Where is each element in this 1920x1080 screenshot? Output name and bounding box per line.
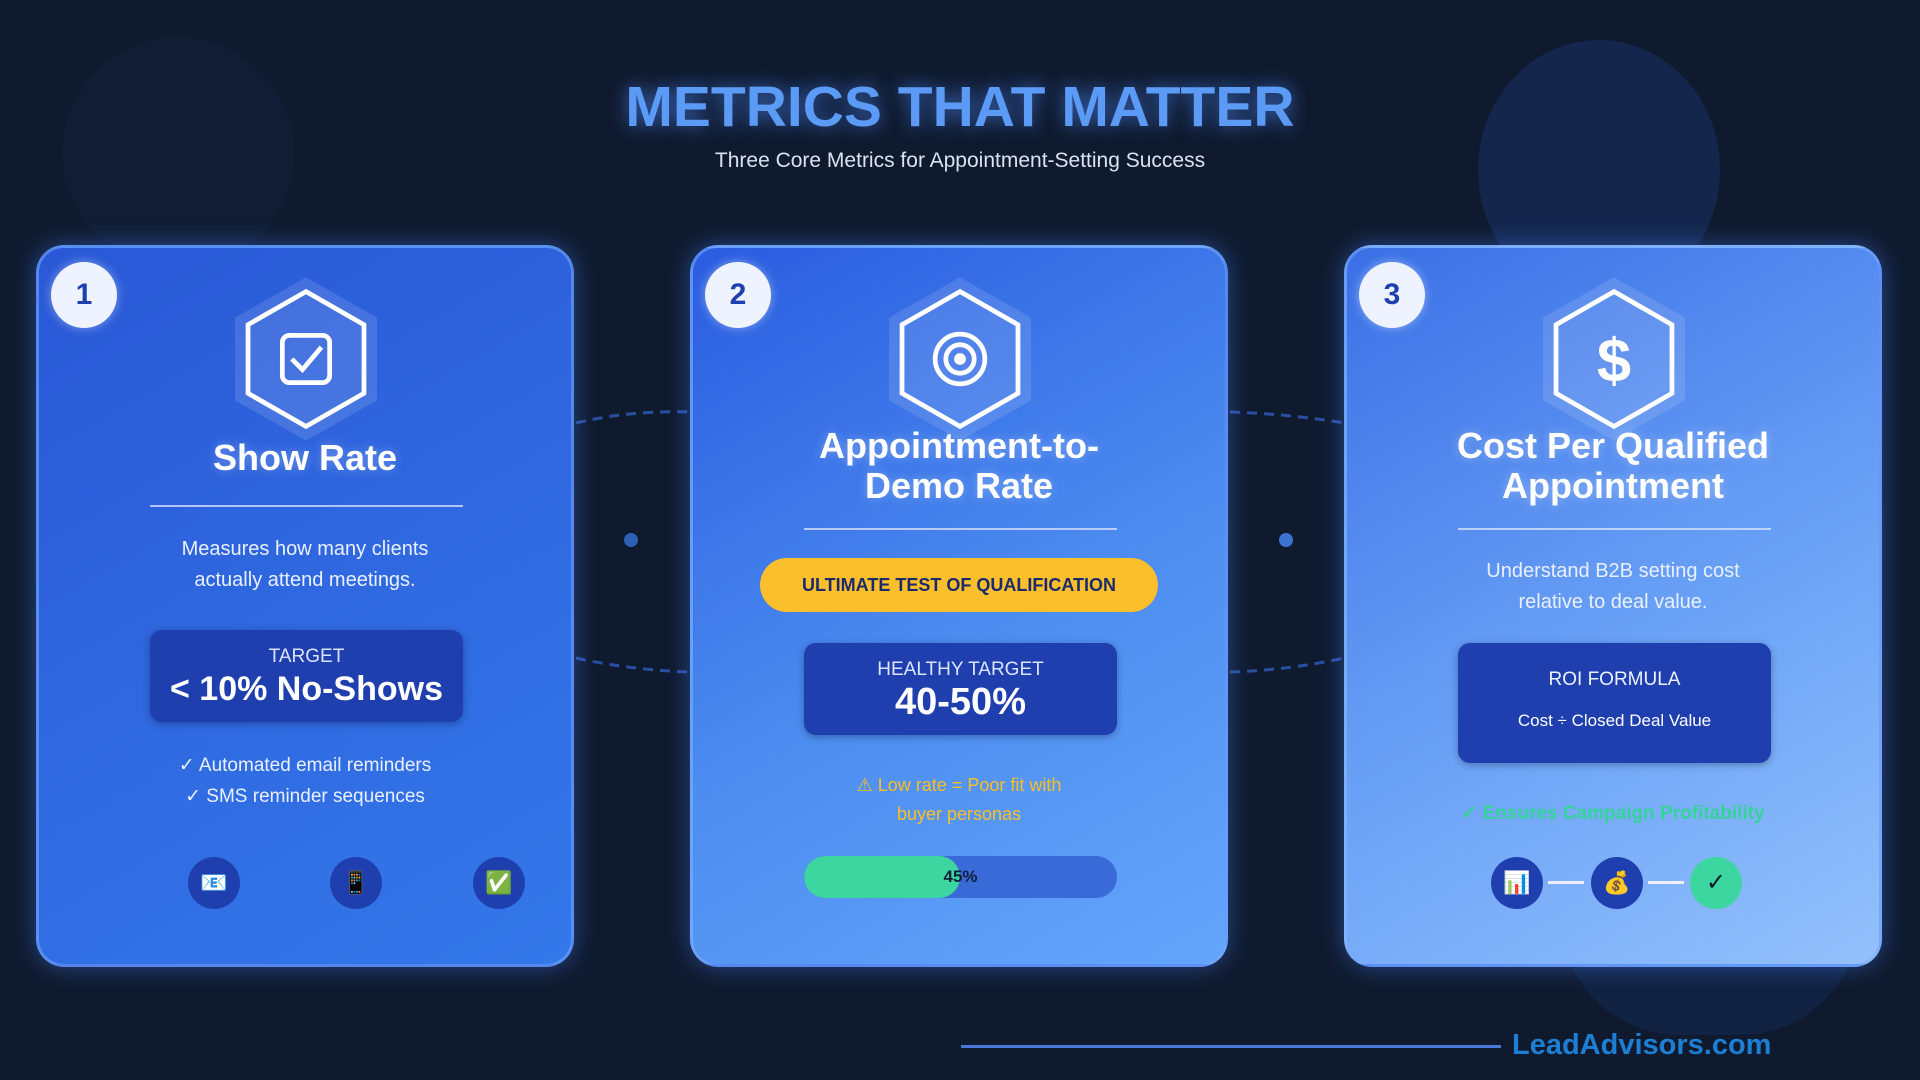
badge 2 [705,262,771,328]
flow icons: 📊 [1503,870,1531,895]
flow icons: ✓ [1706,869,1726,896]
pill [760,558,1158,612]
background shape right bottom [1560,600,1860,1035]
description: actually attend meetings. [194,569,416,591]
warning: ⚠ Low rate = Poor fit with [857,775,1061,795]
heading: Demo Rate [865,465,1053,506]
progress bar [804,856,1117,898]
roi formula box [1458,643,1771,763]
warning: buyer personas [897,804,1021,824]
background circle right [1478,40,1720,300]
description: Understand B2B setting cost [1486,560,1740,582]
healthy target box: 40-50% [895,681,1026,723]
target box: < 10% No-Shows [170,670,443,708]
icon: dollar hexagon [1543,278,1685,440]
footer line [961,1045,1501,1048]
pill: ULTIMATE TEST OF QUALIFICATION [802,575,1116,595]
background circle left [62,37,294,269]
description: Measures how many clients [182,538,428,560]
icons row: ✅ [485,870,513,895]
checklist: ✓ Automated email reminders [179,755,431,776]
icons row: 📧 [200,870,228,895]
icon: checkbox hexagon [235,278,377,440]
heading: Show Rate [213,437,397,478]
icon: dollar hexagon: $ [1597,326,1631,395]
healthy target box: HEALTHY TARGET [877,659,1044,680]
badge 1 [51,262,117,328]
badge 1: 1 [76,278,92,311]
description: relative to deal value. [1518,591,1708,613]
panel: cost per qualified appointment [1344,245,1882,967]
heading: Appointment-to- [819,425,1099,466]
icons row: 📱 [342,870,370,895]
heading: Cost Per Qualified [1457,425,1769,466]
progress bar: 45% [943,867,978,886]
flow icons: 💰 [1603,870,1631,895]
badge 3: 3 [1384,278,1400,311]
profitability note: ✓ Ensures Campaign Profitability [1461,803,1765,824]
panel: appointment-to-demo [690,245,1228,967]
target box [150,630,463,722]
icons row [188,857,525,909]
roi formula box: ROI FORMULA [1549,669,1680,690]
panel: show rate [36,245,574,967]
subtitle: Three Core Metrics for Appointment-Setting Success [715,149,1205,172]
checklist: ✓ SMS reminder sequences [185,786,425,807]
heading [1455,425,1770,506]
flow icons [1491,857,1742,909]
heading: Appointment [1502,465,1724,506]
badge 3 [1359,262,1425,328]
healthy target box [804,643,1117,735]
description [1486,560,1740,613]
icon: target hexagon [889,278,1031,440]
checklist [179,755,431,807]
title: METRICS THAT MATTER [625,75,1295,139]
roi formula box: Cost ÷ Closed Deal Value [1518,711,1711,730]
target box: TARGET [269,646,344,667]
badge 2: 2 [730,278,746,311]
warning [857,775,1061,824]
footer brand: LeadAdvisors.com [1512,1029,1771,1061]
heading [818,425,1099,506]
description [182,538,428,591]
